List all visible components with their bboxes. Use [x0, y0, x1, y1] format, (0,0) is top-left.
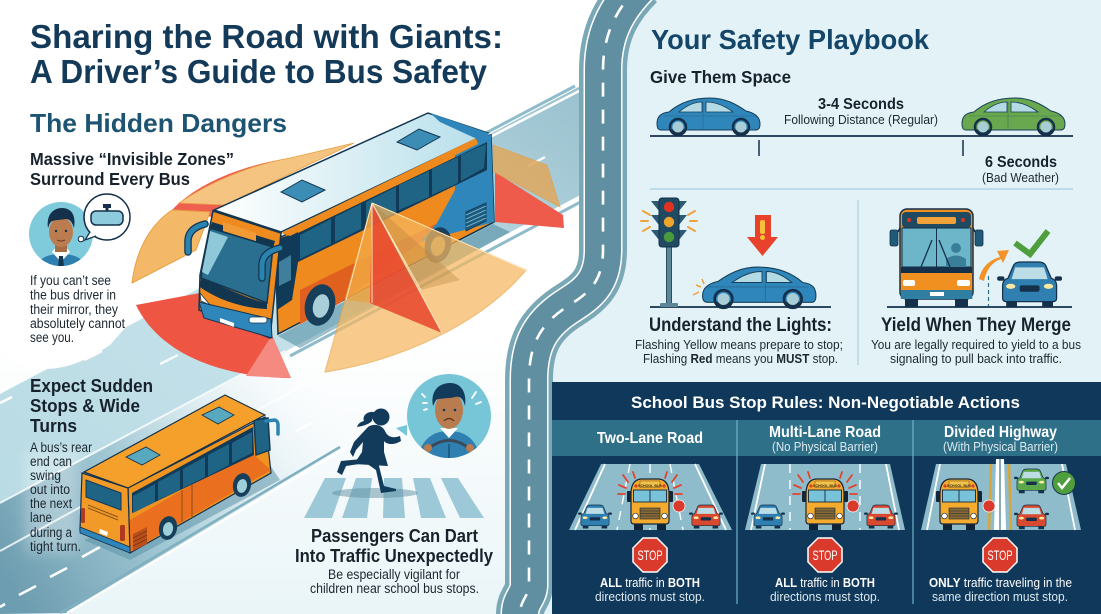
- column: multi-lane road: SCHOOL BUS: [813, 484, 838, 488]
- label: bad weather: (Bad Weather): [982, 170, 1059, 185]
- label: 3-4 seconds: 3-4 Seconds: [818, 96, 904, 113]
- text: lights: Flashing Red means you MUST stop.: [643, 351, 838, 366]
- bus roof: [214, 113, 488, 232]
- crosswalk: [304, 478, 484, 518]
- text: wide turns: lane: [30, 510, 52, 525]
- column: divided highway: SCHOOL BUS: [947, 484, 972, 488]
- main bus: [188, 113, 510, 348]
- car: blue: [657, 98, 760, 136]
- rear vent: [466, 203, 486, 231]
- following distance diagram: [650, 96, 1073, 185]
- icon: worried driver: [396, 374, 491, 462]
- text: wide turns: [30, 440, 92, 554]
- heading: your safety playbook: Your Safety Playbook: [651, 24, 929, 55]
- bus side body: [275, 135, 494, 334]
- illustration: traffic light and car: [641, 198, 831, 309]
- text: lights: [635, 337, 843, 366]
- column: divided highway: (With Physical Barrier): [943, 440, 1058, 454]
- heading: sudden stops: [30, 376, 153, 436]
- heading: passengers dart: Passengers Can Dart: [311, 526, 478, 546]
- panel: school bus stop rules: [552, 382, 1101, 614]
- bus turning, rear view: [80, 395, 280, 560]
- white text backdrop, top left: [0, 0, 540, 369]
- heading: yield when they merge: Yield When They Merge: [881, 314, 1071, 336]
- heading: sudden stops: Stops & Wide: [30, 396, 140, 416]
- mirrors: [188, 224, 205, 252]
- text: mirror rule: their mirror, they: [30, 302, 118, 317]
- icon: red warning arrow: [747, 215, 778, 256]
- column: multi-lane road: Multi-Lane Road: [769, 424, 881, 441]
- label: following distance: Following Distance (Regular): [784, 112, 938, 127]
- glow behind bus text: [26, 452, 78, 552]
- text: mirror rule: absolutely cannot: [30, 316, 125, 331]
- text: lights: Flashing Yellow means prepare to stop;: [635, 337, 843, 352]
- heading: give them space: Give Them Space: [650, 67, 791, 87]
- column: two-lane road: SCHOOL BUS: [638, 484, 663, 488]
- text: wide turns: tight turn.: [30, 539, 81, 554]
- heading: invisible zones: Surround Every Bus: [30, 169, 190, 189]
- text: mirror rule: If you can’t see: [30, 273, 111, 288]
- title: A Driver’s Guide to Bus Safety: [30, 53, 488, 90]
- column: two-lane road: directions must stop.: [595, 589, 705, 604]
- bus front: [199, 211, 281, 338]
- column: multi-lane road: ALL traffic in BOTH: [775, 575, 875, 590]
- heading: the hidden dangers: The Hidden Dangers: [30, 108, 287, 138]
- column: divided highway: same direction must stop.: [932, 589, 1068, 604]
- roof hatches: [281, 180, 325, 202]
- text: wide turns: out into: [30, 482, 70, 497]
- text: mirror rule: see you.: [30, 330, 74, 345]
- text: mirror rule: the bus driver in: [30, 288, 116, 302]
- diagonal road behind buses: [0, 65, 620, 614]
- text: vigilance: Be especially vigilant for: [328, 567, 460, 582]
- column: multi-lane road: STOP: [812, 547, 838, 563]
- icon: driver and mirror thought bubble: [29, 194, 130, 268]
- text: wide turns: end can: [30, 454, 72, 469]
- title: Sharing the Road with Giants:: [30, 18, 503, 55]
- icon: merge arrow: [979, 250, 1009, 281]
- car: green: [962, 98, 1065, 136]
- text: mirror rule: [30, 273, 125, 345]
- column: multi-lane road: [745, 424, 905, 604]
- heading: school bus stop rules: School Bus Stop Rules: Non-Negotiable Actions: [631, 393, 1020, 412]
- heading: invisible zones: Massive “Invisible Zones”: [30, 149, 234, 169]
- heading: sudden stops: Turns: [30, 416, 77, 436]
- text: wide turns: swing: [30, 468, 61, 483]
- column: two-lane road: ALL traffic in BOTH: [600, 575, 700, 590]
- illustration: bus merging: [887, 209, 1072, 307]
- winding road: [520, 0, 640, 614]
- right panel background: [520, 0, 1101, 614]
- column: divided highway: STOP: [988, 547, 1012, 563]
- text: vigilance: children near school bus stops.: [310, 581, 479, 596]
- title: [30, 18, 503, 90]
- text: yield: [871, 337, 1081, 366]
- blind zones behind main bus: [132, 143, 564, 378]
- heading: passengers dart: Into Traffic Unexpectedly: [295, 546, 493, 566]
- icon: green check: [1015, 231, 1048, 254]
- text: yield: signaling to pull back into traffic.: [890, 351, 1062, 366]
- heading: passengers dart: [295, 526, 493, 566]
- heading: sudden stops: Expect Sudden: [30, 376, 153, 396]
- heading: understand the lights: Understand the Lights:: [649, 314, 832, 336]
- text: yield: You are legally required to yield to a bus: [871, 337, 1081, 352]
- heading: invisible zones: [30, 149, 234, 189]
- column: divided highway: [921, 424, 1081, 604]
- child running: [332, 408, 418, 498]
- icon: check badge: [1052, 472, 1076, 494]
- text: wide turns: during a: [30, 525, 72, 540]
- label: 6 seconds: 6 Seconds: [985, 154, 1057, 171]
- side blind zone over bus: [325, 203, 526, 372]
- column: two-lane road: Two-Lane Road: [597, 430, 703, 447]
- column: divided highway: ONLY traffic traveling in the: [929, 575, 1072, 590]
- lower-left background wash: [0, 340, 560, 614]
- column: two-lane road: [569, 430, 732, 604]
- column: multi-lane road: directions must stop.: [770, 589, 880, 604]
- text: wide turns: the next: [30, 496, 72, 511]
- column: multi-lane road: (No Physical Barrier): [772, 440, 878, 454]
- text: vigilance: [310, 567, 479, 596]
- column: two-lane road: STOP: [638, 547, 662, 563]
- column: divided highway: Divided Highway: [944, 424, 1057, 441]
- text: wide turns: A bus’s rear: [30, 440, 92, 455]
- bus windows: [298, 142, 487, 262]
- bus wheel: [300, 281, 340, 329]
